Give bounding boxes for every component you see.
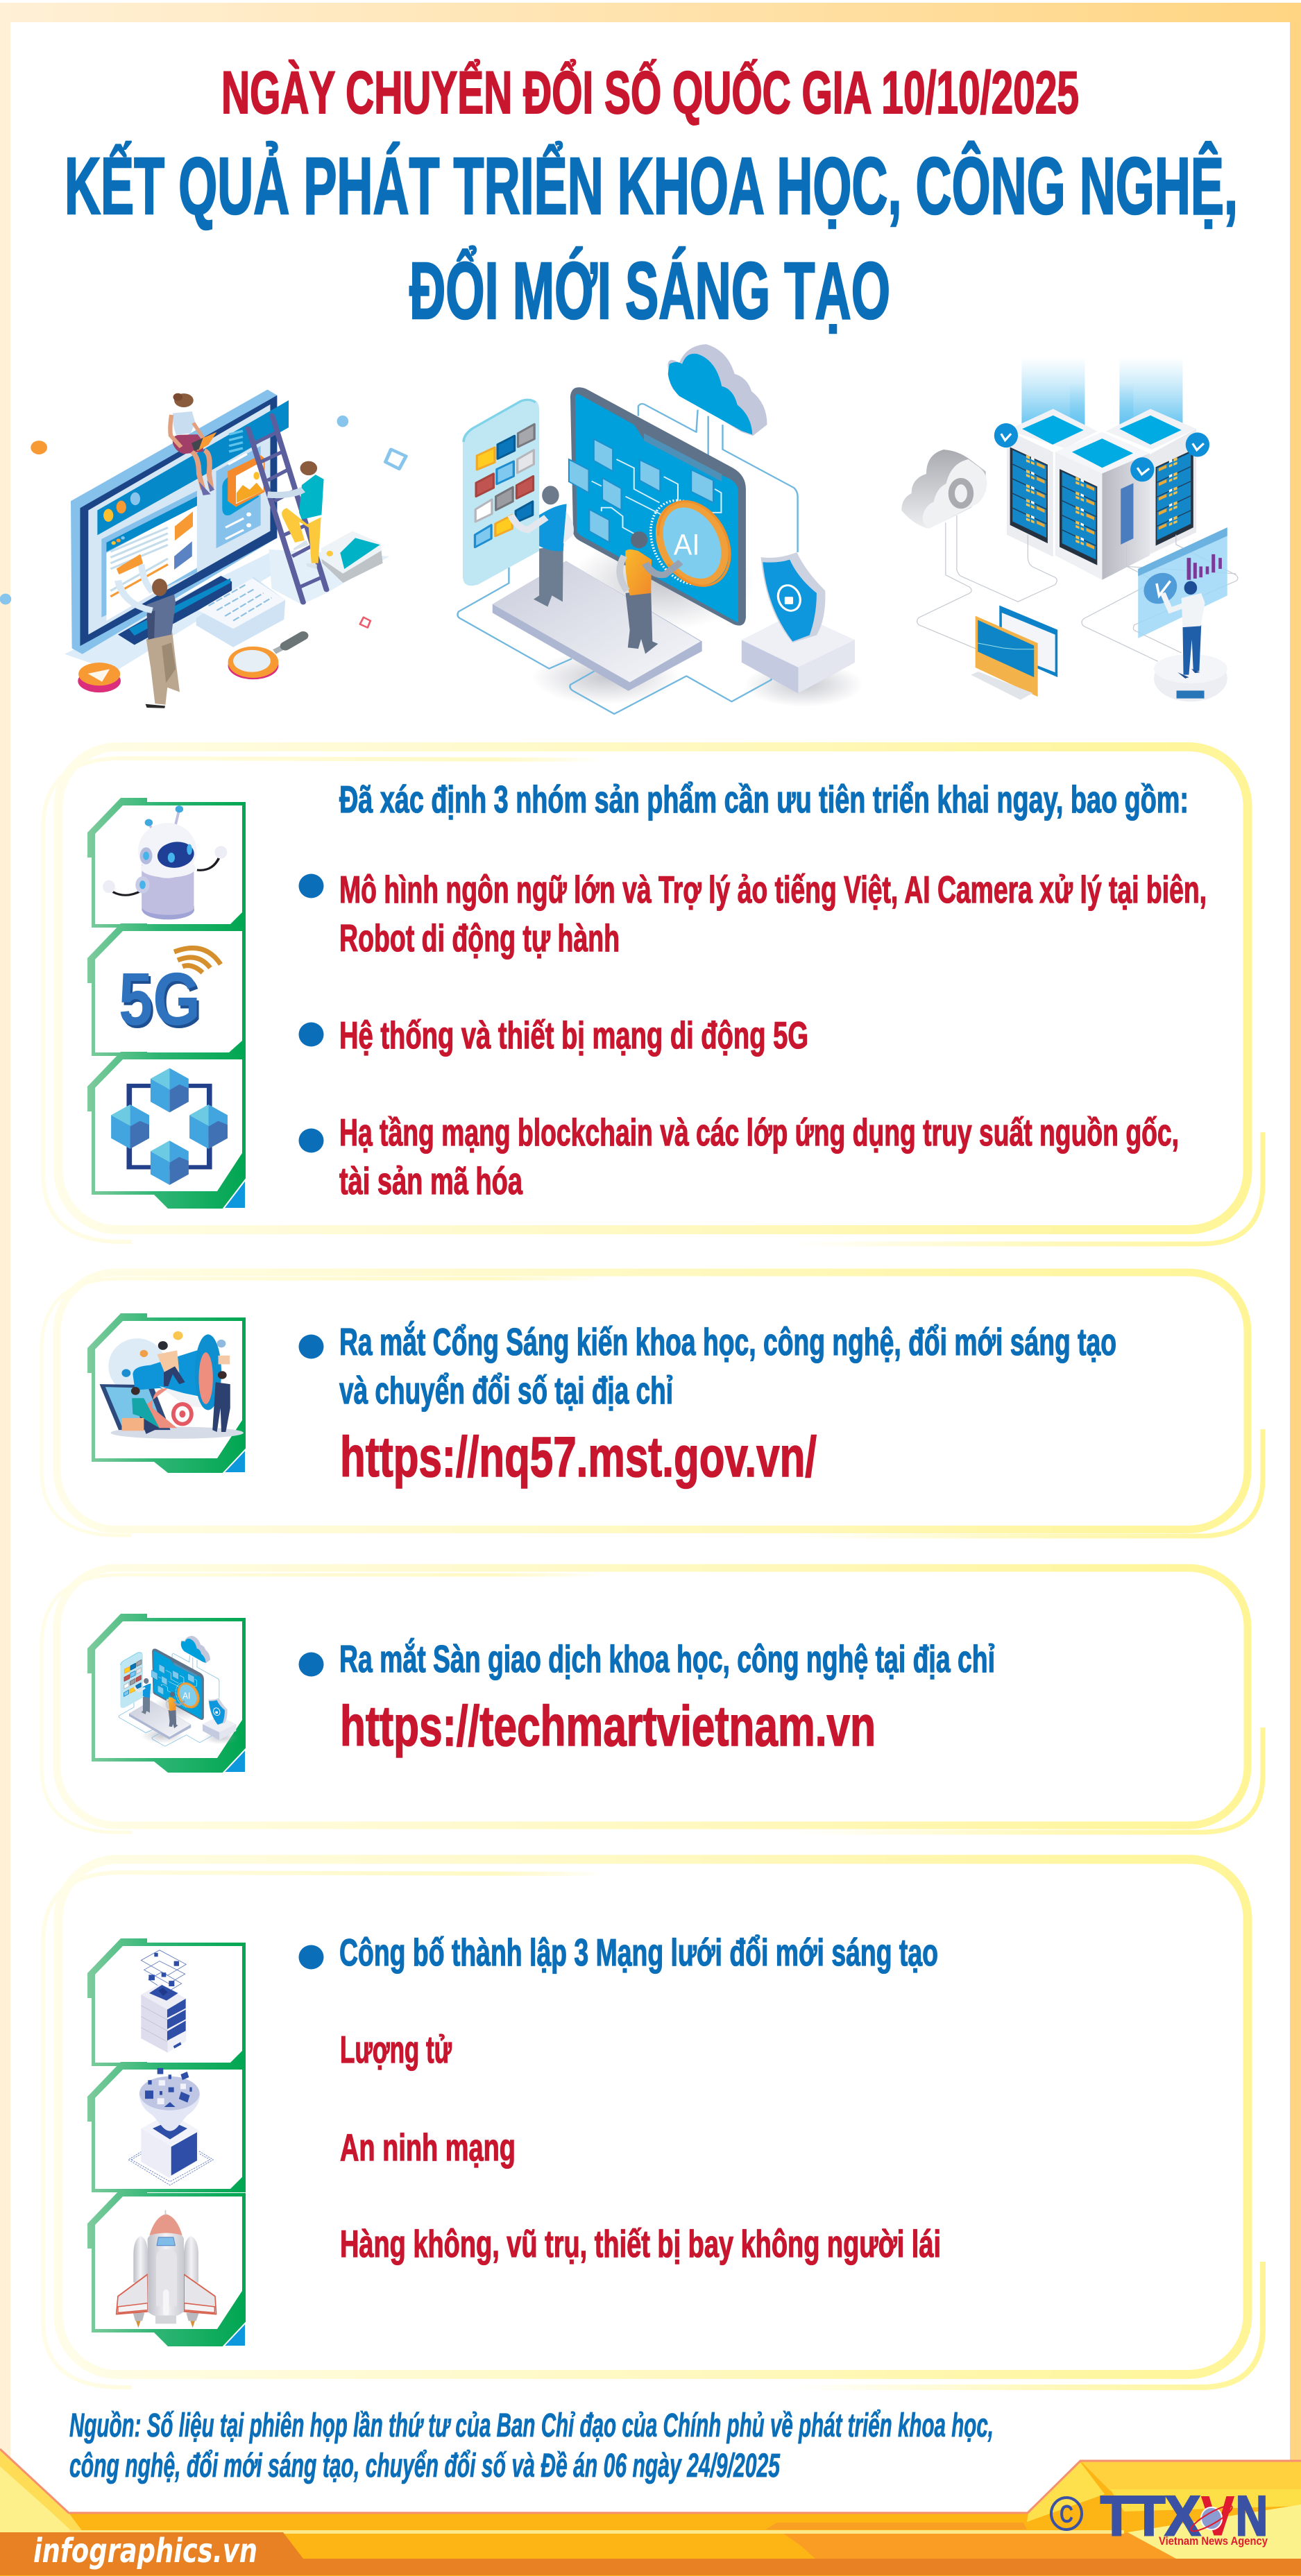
source note [69, 2407, 994, 2484]
panel: tech marketplace [42, 1568, 1263, 1832]
networks list: Lượng tử [340, 2028, 452, 2071]
site label: infographics.vn [33, 2532, 257, 2570]
portal url: https://nq57.mst.gov.vn/ [340, 1426, 817, 1489]
portal text: và chuyển đổi số tại địa chỉ [339, 1369, 673, 1412]
illustration: website design team [0, 389, 406, 708]
icon: launch scene [87, 1313, 246, 1473]
illustration: data center [901, 357, 1238, 701]
networks list: Hàng không, vũ trụ, thiết bị bay không người lái [340, 2222, 941, 2265]
icon: 5G frame [87, 923, 246, 1056]
logo: TTXVN [1051, 2485, 1268, 2548]
icon: blockchain [111, 1068, 228, 1185]
icon: robot frame [87, 798, 246, 928]
panel: innovation networks [43, 1859, 1263, 2387]
icon: cyber funnel frame [87, 2062, 246, 2192]
bullet [298, 1945, 323, 1969]
icon: quantum server frame [87, 1938, 246, 2066]
panel: innovation portal [42, 1272, 1263, 1536]
portal text [339, 1320, 1116, 1412]
logo: TTXVN: TTX [1100, 2485, 1200, 2548]
marketplace text: Ra mắt Sàn giao dịch khoa học, công nghệ tại địa chỉ [339, 1637, 995, 1680]
icon: 5G: 5G [121, 959, 203, 1043]
icon: rocket frame [87, 2189, 246, 2346]
icon: robot [103, 805, 227, 919]
footer band [0, 2449, 1301, 2576]
icon: marketplace scene [87, 1614, 246, 1773]
bullet [298, 1653, 323, 1676]
illustration: AI control screen [457, 344, 863, 714]
icon: blockchain frame [87, 1052, 246, 1209]
networks list: An ninh mạng [340, 2126, 516, 2169]
item text [339, 868, 1207, 1202]
marketplace url: https://techmartvietnam.vn [340, 1695, 876, 1758]
title: ĐỔI MỚI SÁNG TẠO [409, 246, 890, 336]
bullet [298, 1128, 323, 1153]
source note: công nghệ, đổi mới sáng tạo, chuyển đổi số và Đề án 06 ngày 24/9/2025 [69, 2448, 781, 2484]
logo: TTXVN: V [1201, 2485, 1234, 2548]
icon: quantum server [141, 1950, 186, 2053]
item text: Robot di động tự hành [339, 916, 620, 959]
icon: cyber funnel [128, 2068, 213, 2185]
bullet [298, 1023, 323, 1046]
title [65, 60, 1238, 336]
logo: TTXVN: C [1060, 2500, 1073, 2528]
item text: Hệ thống và thiết bị mạng di động 5G [339, 1014, 808, 1057]
bullet [298, 874, 323, 898]
logo: TTXVN: N [1236, 2485, 1268, 2548]
panel: priority product groups [43, 747, 1263, 1244]
item text: tài sản mã hóa [339, 1159, 522, 1202]
icon: rocket [117, 2210, 216, 2328]
icon: 5G: 5G [119, 957, 201, 1041]
bullet [298, 1335, 323, 1358]
logo: TTXVN: Vietnam News Agency [1159, 2534, 1268, 2548]
networks heading: Công bố thành lập 3 Mạng lưới đổi mới sáng tạo [339, 1931, 938, 1974]
networks list [340, 2028, 941, 2265]
